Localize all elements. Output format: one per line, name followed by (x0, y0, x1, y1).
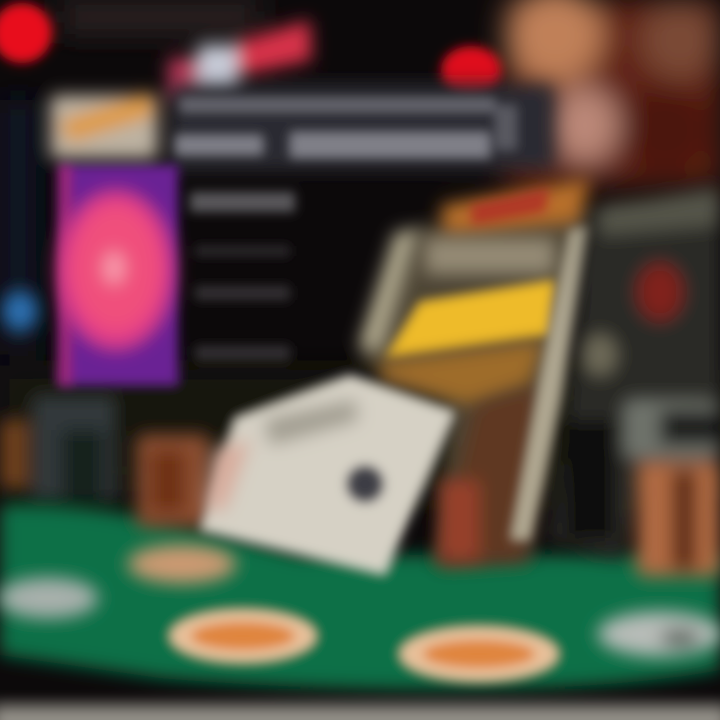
chip white left (0, 578, 98, 618)
red light top left (0, 3, 52, 63)
yellow panel (385, 280, 555, 358)
logo badge (50, 92, 158, 159)
title band (170, 84, 555, 170)
orange lower band (380, 340, 545, 405)
card spot (347, 466, 383, 502)
chip top left (128, 545, 236, 583)
title text bars (175, 98, 517, 158)
chip white right (598, 612, 720, 656)
red light top centre (441, 46, 501, 94)
red and orange top stripe (440, 178, 590, 235)
stacked box frame (358, 178, 590, 565)
chip centre right (399, 626, 559, 682)
pale side strut (510, 225, 590, 540)
orange cup (137, 435, 209, 527)
card text (265, 400, 358, 445)
man in grey jacket (550, 185, 720, 560)
right cups (622, 398, 720, 576)
list text bars (190, 192, 295, 360)
background glows (0, 0, 720, 500)
green table (0, 504, 720, 690)
pale middle band (425, 238, 555, 274)
flag (168, 20, 312, 100)
blue light left (2, 291, 38, 331)
left cups (0, 395, 116, 500)
chip centre left (169, 609, 317, 663)
person at top right (505, 0, 720, 185)
brown base (435, 385, 540, 565)
purple poster card (58, 165, 178, 385)
pink wheel (58, 190, 174, 350)
table floor (0, 705, 720, 720)
white playing card (200, 375, 455, 575)
